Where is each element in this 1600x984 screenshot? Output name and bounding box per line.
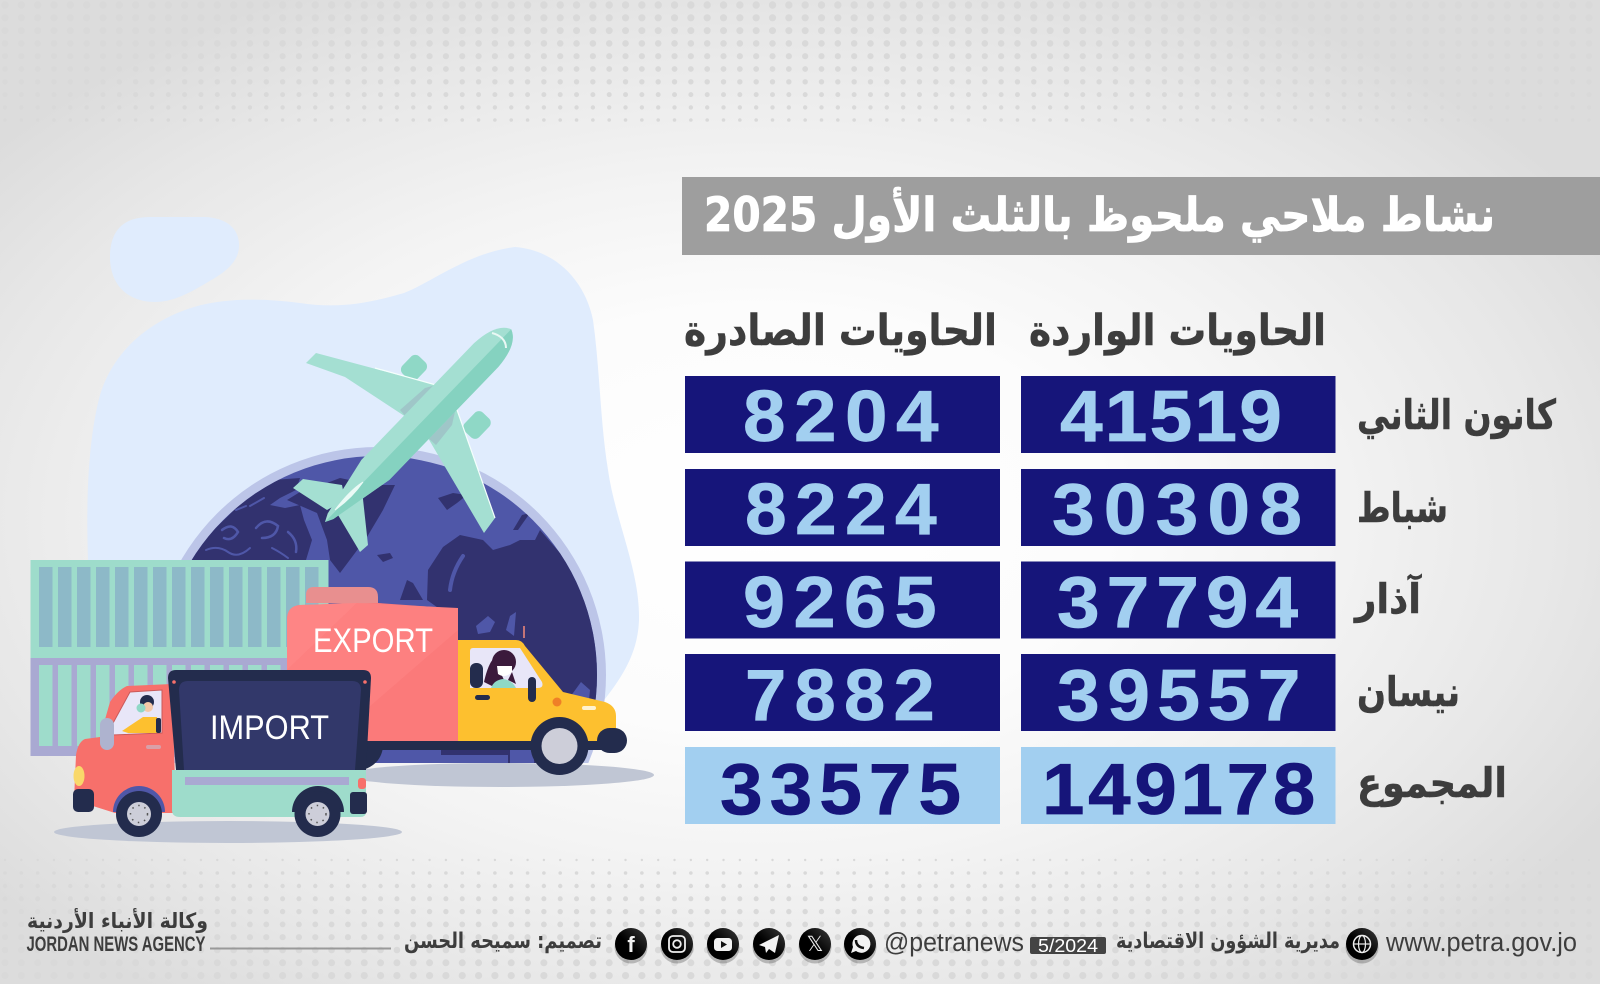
title bar [682,177,1600,255]
title bar: نشاط ملاحي ملحوظ بالثلث الأول 2025 [704,186,1495,243]
row: March: 37794 [1057,563,1305,643]
data table [685,376,1556,830]
row: April: 39557 [1057,656,1308,736]
social handle: @petranews [884,929,1024,957]
globe [174,447,606,763]
row: April: نيسان [1357,668,1460,716]
issue date tag: 5/2024 [1038,936,1098,956]
icon: website globe [1346,928,1378,960]
department name: مديرية الشؤون الاقتصادية [1116,929,1340,954]
footer [26,907,1577,964]
agency logo: وكالة الأنباء الأردنية [27,907,208,933]
row: total: 33575 [720,750,968,830]
shipping containers [30,560,328,756]
social icons [614,928,1378,964]
import truck: IMPORT [210,709,329,747]
row: March [685,562,1422,643]
row: total [685,747,1507,830]
designer credit: تصميم: سميحه الحسن [404,929,602,954]
driver: woman with mask [484,650,516,688]
row: February [685,469,1448,550]
row: February: 8224 [745,470,945,550]
row: March: 9265 [743,563,945,643]
row: total: 149178 [1042,750,1319,830]
row: April: 7882 [745,656,943,736]
social icons: f [627,932,635,957]
import truck [54,670,402,843]
wings and tail [293,353,495,552]
column heading: incoming containers: الحاويات الواردة [1029,306,1326,356]
background blobs [87,217,639,705]
export truck [287,587,654,787]
row: January [685,376,1556,457]
agency logo [26,907,208,956]
row: January: 8204 [743,377,947,457]
driver: man with mask [122,695,161,733]
row: April [685,654,1460,736]
website url: www.petra.gov.jo [1385,929,1577,957]
row: February: 30308 [1052,470,1311,550]
airplane [293,317,523,552]
row: February: شباط [1357,484,1448,532]
illustration: logistics scene [30,217,654,903]
row: March: آذار [1353,574,1422,623]
row: January: 41519 [1060,377,1284,457]
social icons: 𝕏 [807,933,823,956]
fuselage [313,317,523,534]
row: total: المجموع [1357,759,1507,807]
row: January: كانون الثاني [1357,391,1556,439]
agency logo: JORDAN NEWS AGENCY [26,933,206,956]
column heading: outgoing containers: الحاويات الصادرة [684,306,997,356]
export truck: EXPORT [313,622,433,660]
engines [398,352,493,441]
